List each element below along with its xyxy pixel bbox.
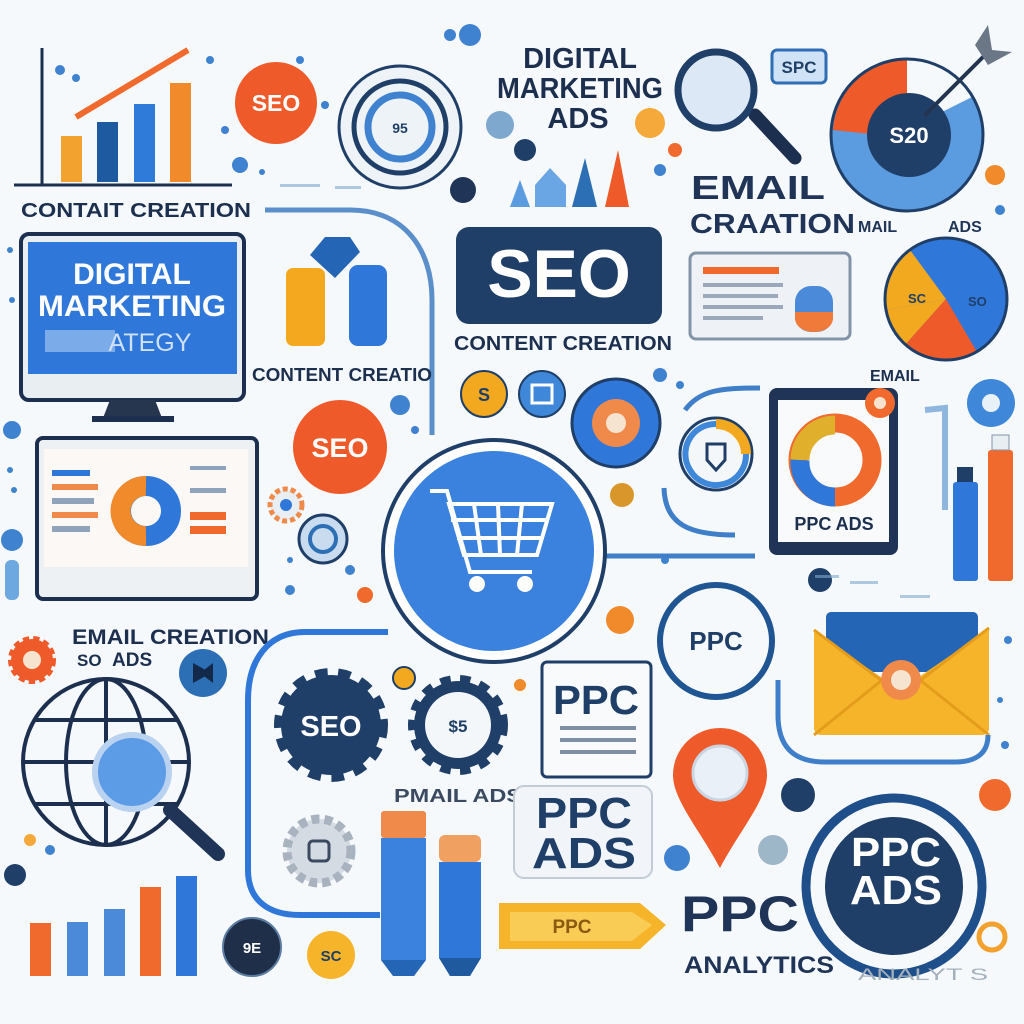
bar chart: top left <box>14 48 232 185</box>
icon: small orange dot <box>393 667 415 689</box>
badge: PPC ADS box: PPC <box>536 789 632 838</box>
gauge: target with arrow: S20 <box>889 123 929 148</box>
tag: SPC <box>772 50 826 83</box>
icon: navy ring <box>299 515 347 563</box>
panel: document card <box>690 253 850 339</box>
badge: PPC ADS box: ADS <box>532 829 636 878</box>
connector: center right curves <box>606 388 760 556</box>
badge: SEO red <box>293 400 387 494</box>
heading: PPC analytics: ANALYTICS <box>684 952 834 979</box>
badge: SEO orange <box>235 62 317 144</box>
panel: monitor digital marketing strategy <box>21 234 244 422</box>
heading: email creation ads: EMAIL CREATION <box>72 626 269 649</box>
panel: tablet PPC ads: PPC ADS <box>794 514 874 534</box>
icon: SEO gear <box>281 675 381 775</box>
label: email: EMAIL <box>870 368 920 385</box>
connector: envelope curve <box>778 680 988 762</box>
heading: digital marketing ads: MARKETING <box>497 73 663 105</box>
icon: small coin <box>461 371 507 417</box>
connector: top curve <box>265 210 432 435</box>
badge: PPC ADS circle <box>806 798 982 974</box>
icon: yellow coin: SC <box>321 948 342 965</box>
panel: monitor digital marketing strategy: ATEGY <box>109 329 192 357</box>
panel: monitor digital marketing strategy: MARKETING <box>38 290 226 323</box>
heading: digital marketing ads: DIGITAL <box>523 43 637 75</box>
icon: small blue coin <box>519 371 565 417</box>
tag: SPC: SPC <box>782 58 816 77</box>
heading: digital marketing ads <box>497 43 663 135</box>
panel: tablet PPC ads <box>769 388 898 555</box>
badge: PPC ring: PPC <box>689 626 743 656</box>
badge: SEO dark box: SEO <box>487 236 631 312</box>
heading: PPC analytics <box>681 886 834 979</box>
panel: PPC document <box>542 662 651 777</box>
badge: SEO red: SEO <box>311 433 369 463</box>
heading: email creation mail ads: CRAATION <box>690 208 855 239</box>
icon: dark coin: 9E <box>243 940 261 957</box>
icon: envelope <box>814 612 989 735</box>
icon: red gear <box>11 639 53 681</box>
heading: content creation: CONTAIT CREATION <box>21 200 251 222</box>
icon: white gear: $5 <box>449 717 467 736</box>
badge: PPC ADS circle: ADS <box>850 867 942 913</box>
label: content creation: CONTENT CREATIO <box>252 365 432 385</box>
badge: PPC ADS box <box>514 786 652 878</box>
heading: email creation mail ads: ADS <box>948 219 982 236</box>
heading: email creation ads: ADS <box>112 650 152 671</box>
icon: play circle <box>179 649 227 697</box>
chart: tall tubes <box>381 811 481 976</box>
chart: right bars <box>925 408 1013 581</box>
icon: email circle <box>967 379 1015 427</box>
badge: SEO orange: SEO <box>252 90 300 116</box>
connector: left long curve <box>248 632 388 915</box>
icon: map pin <box>673 728 767 868</box>
heading: email creation mail ads: MAIL <box>858 219 897 236</box>
arrow tag: PPC <box>499 903 666 949</box>
icon: shield ring <box>680 418 752 490</box>
panel: monitor digital marketing strategy: DIGITAL <box>73 258 191 291</box>
panel: dashboard monitor <box>37 438 257 599</box>
icon: small gear <box>270 489 302 521</box>
heading: email creation mail ads <box>690 169 982 239</box>
icon: magnifier <box>678 52 795 158</box>
badge: PPC ring <box>660 585 772 697</box>
heading: digital marketing ads: ADS <box>547 103 609 135</box>
icon: SEO gear: SEO <box>300 711 362 743</box>
icon: shopping cart circle <box>383 440 605 662</box>
icon: globe magnifier <box>23 679 218 854</box>
badge: SEO dark box <box>456 227 662 324</box>
icon: dark coin <box>223 918 281 976</box>
icon: target medallion <box>339 66 461 188</box>
icon: target medallion: 95 <box>392 120 408 136</box>
heading: email creation mail ads: EMAIL <box>691 169 825 206</box>
heading: email creation ads <box>72 626 269 671</box>
chart: rounded bars <box>286 237 387 346</box>
chart: mini peaks <box>510 150 629 207</box>
icon: small coin: S <box>478 385 490 405</box>
bar chart: bottom left <box>30 876 197 976</box>
chart: pie circle: SO <box>968 294 987 309</box>
icon: donut <box>572 379 660 467</box>
badge: PPC ADS circle: PPC <box>851 829 941 875</box>
label: content creation center: CONTENT CREATION <box>454 333 672 355</box>
heading: PPC analytics: PPC <box>681 886 799 942</box>
panel: PPC document: PPC <box>553 677 639 723</box>
label: faded analytics: ANALYT S <box>858 965 988 984</box>
chart: pie circle: SC <box>908 291 927 306</box>
icon: white gear <box>414 681 502 769</box>
icon: yellow coin <box>307 931 355 979</box>
label: pmail ads: PMAIL ADS <box>394 786 522 806</box>
heading: email creation ads: SO <box>77 651 102 670</box>
gauge: target with arrow <box>831 25 1012 211</box>
arrow tag: PPC: PPC <box>552 917 592 938</box>
icon: orange ring <box>979 924 1005 950</box>
chart: pie circle <box>885 238 1007 361</box>
icon: silver gear <box>287 819 351 883</box>
